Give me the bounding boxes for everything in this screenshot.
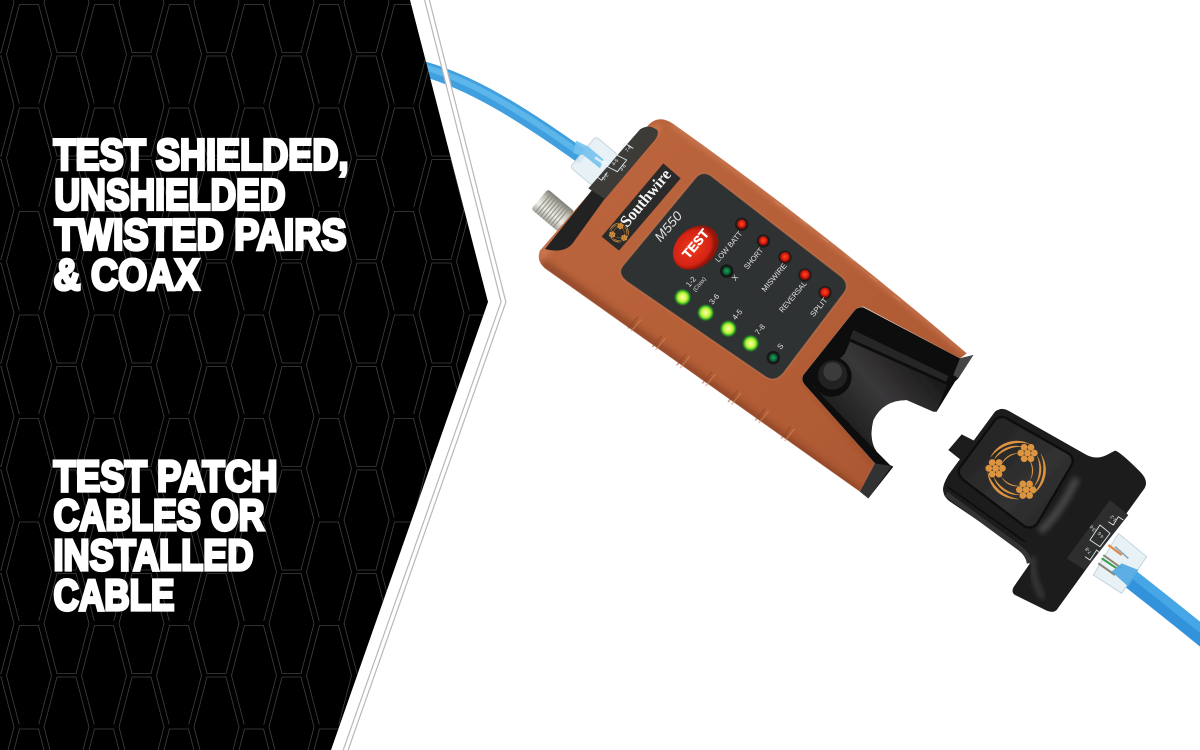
heading: test patch cables or installed cable [54,452,278,620]
heading: test shielded, unshielded twisted pairs and coax: TEST SHIELDED, [54,130,348,180]
LED labels: 4-5 [730,307,744,322]
latch tab [948,434,976,461]
heading: test shielded, unshielded twisted pairs and coax [54,130,348,300]
device: M550 tester [531,119,973,498]
panel: control faceplate [620,173,847,379]
heading: test shielded, unshielded twisted pairs and coax: UNSHIELDED [54,170,286,220]
icon: RJ45 plug [570,136,618,186]
blue cable: remote side [1130,574,1200,645]
end cap: black connector face: 3-6 [619,163,628,173]
label window: pair numbers: 1-2 [1109,514,1117,523]
heading: test patch cables or installed cable: TEST PATCH [54,452,278,501]
jaw rail [850,330,948,382]
label window: pair numbers [1067,500,1128,570]
jaw: black receiver socket [802,307,973,498]
icon: Southwire emblem [985,441,1055,508]
heading: test shielded, unshielded twisted pairs and coax: & COAX [54,250,200,300]
end cap: black connector face: 4-5 [611,158,620,167]
badge: Southwire logo [602,163,681,251]
RJ45 plug with wires [1093,533,1147,593]
end cap: black connector face: 7-8 [624,144,634,154]
body ridges [628,202,900,441]
heading: test patch cables or installed cable: CABLE [54,571,174,620]
chevron outline [345,0,504,750]
LED labels: LOW BATT [713,229,745,264]
jaw floor [813,342,947,452]
badge: Southwire logo: Southwire [616,165,675,231]
blue cable: tester side [424,67,584,158]
button: TEST [664,216,727,279]
heading: test patch cables or installed cable: INSTALLED [54,531,254,580]
LED labels: 7-8 [753,322,767,337]
icon: coax connector [531,189,574,231]
LED labels: (Coax) [692,276,708,293]
heading: test shielded, unshielded twisted pairs and coax: TWISTED PAIRS [54,210,346,260]
label window: pair numbers: 7-8 [1084,546,1092,555]
body: orange housing [539,119,967,493]
LED labels: SHORT [742,246,765,271]
LED labels [684,229,830,351]
label window: pair numbers: 4-5 [1096,531,1105,539]
end cap: black connector face [545,127,658,251]
LED labels: SPLIT [808,296,830,319]
label window: pair numbers: 3-6 [1088,524,1097,533]
LED labels: X [730,273,740,283]
LED labels: 3-6 [707,292,721,306]
panel: black hexagon background [0,0,488,750]
jaw button [812,357,852,397]
indicator LEDs [674,218,832,364]
LED labels: S [775,342,785,351]
device: remote terminator [943,409,1147,612]
remote body [943,409,1146,612]
heading: test patch cables or installed cable: CABLES OR [54,491,264,540]
remote lower side highlight [946,478,1077,598]
remote top cap [959,417,1073,528]
jaw grey tips [860,355,973,498]
LED labels: 1-2 [684,275,698,289]
LED labels: REVERSAL [777,279,809,314]
label: M550: M550 [651,208,686,245]
LED labels: MISWIRE [760,261,789,294]
end cap: black connector face: 1-2 [601,172,610,182]
button: TEST: TEST [679,226,712,261]
